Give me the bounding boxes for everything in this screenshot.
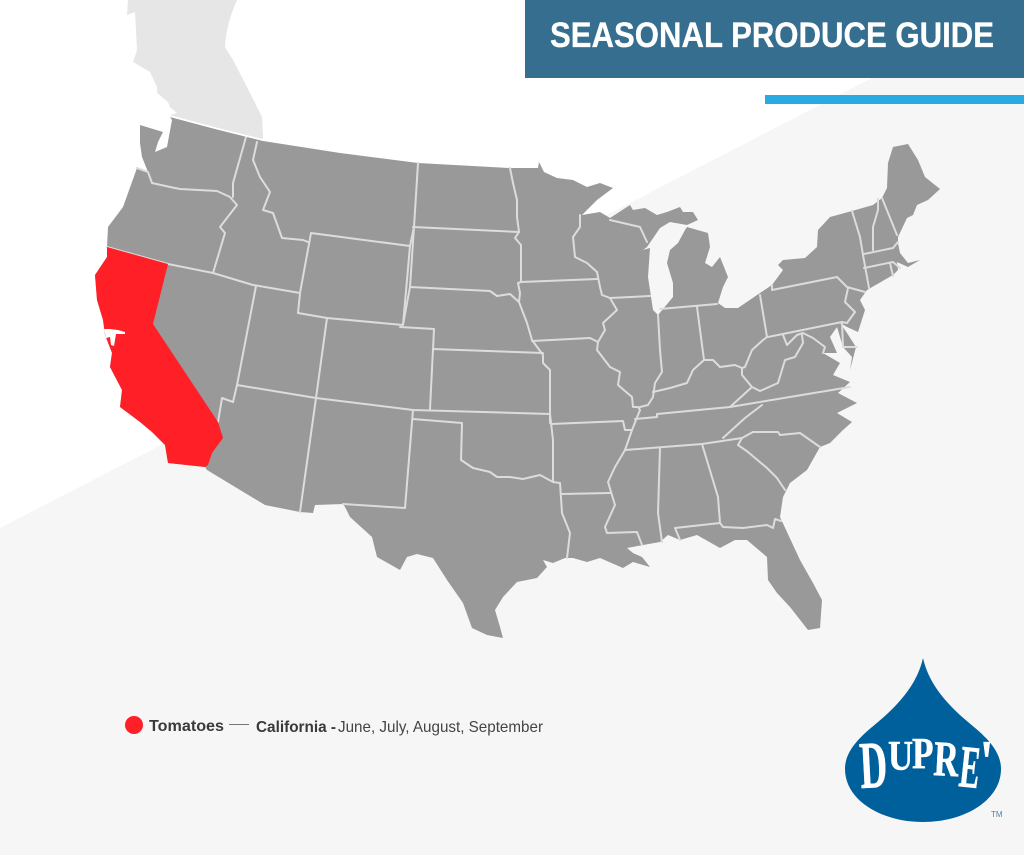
logo wordmark: R	[932, 732, 961, 788]
connector line	[229, 724, 249, 726]
landmass: Canada	[127, 0, 263, 139]
legend state: California -	[256, 719, 336, 736]
state borders	[107, 137, 900, 558]
logo: Dupre drop	[845, 658, 1003, 822]
logo wordmark: D	[858, 728, 889, 803]
California highlighted in red	[95, 247, 223, 467]
logo wordmark: E	[957, 734, 983, 802]
logo wordmark: U	[888, 733, 913, 780]
logo wordmark	[858, 728, 993, 803]
Canada border highlight	[170, 116, 263, 140]
legend marker: tomatoes	[125, 716, 143, 734]
US landmass silhouette	[95, 117, 940, 638]
logo wordmark: P	[912, 728, 934, 778]
legend	[125, 716, 544, 736]
legend months: June, July, August, September	[338, 719, 544, 736]
logo wordmark: '	[980, 729, 993, 795]
legend label: tomatoes: Tomatoes	[149, 718, 224, 735]
trademark: TM	[991, 810, 1003, 819]
accent bar	[765, 95, 1024, 104]
title banner	[525, 0, 1024, 78]
map: United States	[95, 116, 940, 638]
